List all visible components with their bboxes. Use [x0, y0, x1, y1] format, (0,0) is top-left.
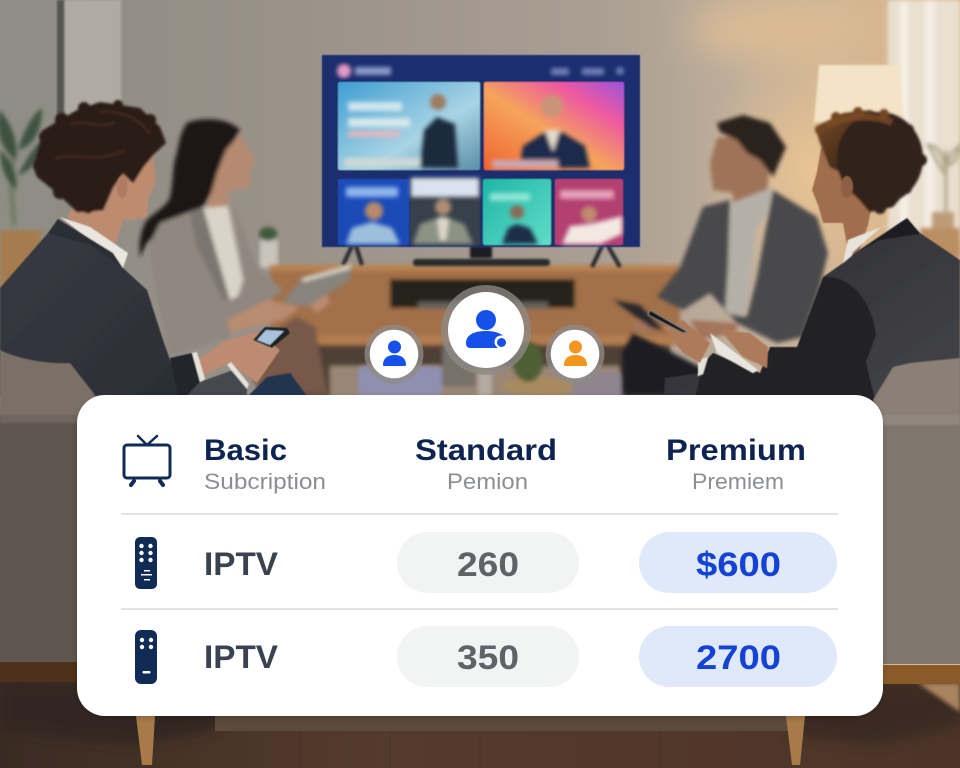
standard price pill: 260: 260 [457, 546, 519, 584]
floor lamp shade [814, 65, 904, 122]
row label: IPTV: IPTV [204, 546, 279, 582]
man's hands [630, 320, 737, 340]
person: man with notepad, foreground right [648, 107, 960, 420]
foreground man's hair [33, 100, 166, 213]
standard price pill: 350: 350 [457, 639, 519, 677]
icon: simple remote control [135, 630, 157, 684]
tv tile two [484, 82, 624, 170]
foreground man's collar [60, 217, 128, 268]
woman's blazer [148, 203, 283, 357]
column heading: Premium [666, 434, 806, 494]
foreground man's shirt cuffs [192, 352, 249, 389]
user avatar: left blue [364, 324, 424, 384]
tv tile six [555, 179, 623, 245]
tv tile three [338, 179, 409, 245]
man's neck and face [710, 135, 770, 225]
icon: remote control with keypad [135, 537, 157, 589]
right man's collar [843, 217, 907, 263]
foreground man's trousers [248, 373, 307, 410]
woman's blouse [203, 206, 243, 312]
user avatar: centre blue, highlighted [441, 285, 531, 375]
standard price pill: 350 [397, 626, 579, 687]
column heading: Standard: Pemion [447, 469, 528, 494]
tv stand [343, 246, 620, 267]
column heading: Premium: Premium [666, 434, 806, 467]
plant on the left [0, 108, 42, 290]
row two [135, 626, 837, 687]
phone [253, 327, 290, 348]
notepad [710, 333, 758, 373]
user avatar: right orange [546, 324, 604, 384]
media cabinet [270, 265, 680, 398]
woman's trousers [240, 317, 328, 395]
television [322, 55, 640, 267]
curtain [888, 0, 960, 240]
cuff [698, 357, 708, 376]
person: man with tablet, background right [613, 115, 828, 395]
sofa: right section [870, 358, 960, 664]
row one [135, 532, 837, 593]
right man's ear [841, 176, 853, 198]
premium price pill: 2700 [639, 626, 837, 687]
foreground man's neck and face [67, 150, 156, 253]
tv tile four [410, 178, 480, 245]
premium price pill: 2700: 2700 [696, 639, 781, 677]
tv bezel and screen [322, 55, 640, 247]
man's jacket [657, 190, 828, 343]
standard price pill: 260 [397, 532, 579, 593]
tv top bar [337, 64, 624, 78]
column heading: Basic: Subcription [204, 469, 326, 494]
coffee table with plant and vase [358, 342, 624, 398]
man's shirt [723, 187, 773, 317]
foreground man's ear [116, 176, 128, 198]
man's hair [717, 115, 786, 177]
premium price pill: $600 [639, 532, 837, 593]
tv tile five [483, 179, 551, 245]
foreground man's hands [197, 332, 280, 383]
foreground man's jacket [0, 219, 183, 396]
man's trousers [622, 333, 720, 395]
right man's jacket [663, 218, 960, 420]
premium price pill: $600: $600 [696, 546, 781, 584]
dark phone [648, 310, 688, 333]
woman's forearm and hands [227, 293, 330, 332]
right man's neck and face [812, 148, 872, 262]
right man's hair [815, 107, 927, 214]
column heading: Basic: Basic [204, 434, 287, 467]
plant on the right [920, 145, 960, 258]
column heading: Standard: Standard [415, 434, 557, 467]
pricing card [77, 395, 883, 716]
person: man with phone, foreground left [0, 100, 307, 410]
column heading: Basic [204, 434, 326, 494]
column heading: Premium: Premiem [692, 469, 784, 494]
sofa: left section [0, 350, 95, 664]
right man's hands [663, 320, 768, 368]
row label: IPTV: IPTV [204, 639, 279, 675]
tv tile one [338, 82, 480, 170]
person: woman with tablet, background left [140, 119, 352, 395]
woman's long hair [140, 119, 240, 257]
icon: television [124, 436, 170, 485]
small wall-side plant pot [259, 227, 278, 268]
woman's tablet [282, 264, 352, 307]
woman's face [207, 134, 255, 208]
man's dark tablet [613, 300, 663, 330]
sofa wood base and floor [0, 662, 960, 768]
column heading: Standard [415, 434, 557, 494]
